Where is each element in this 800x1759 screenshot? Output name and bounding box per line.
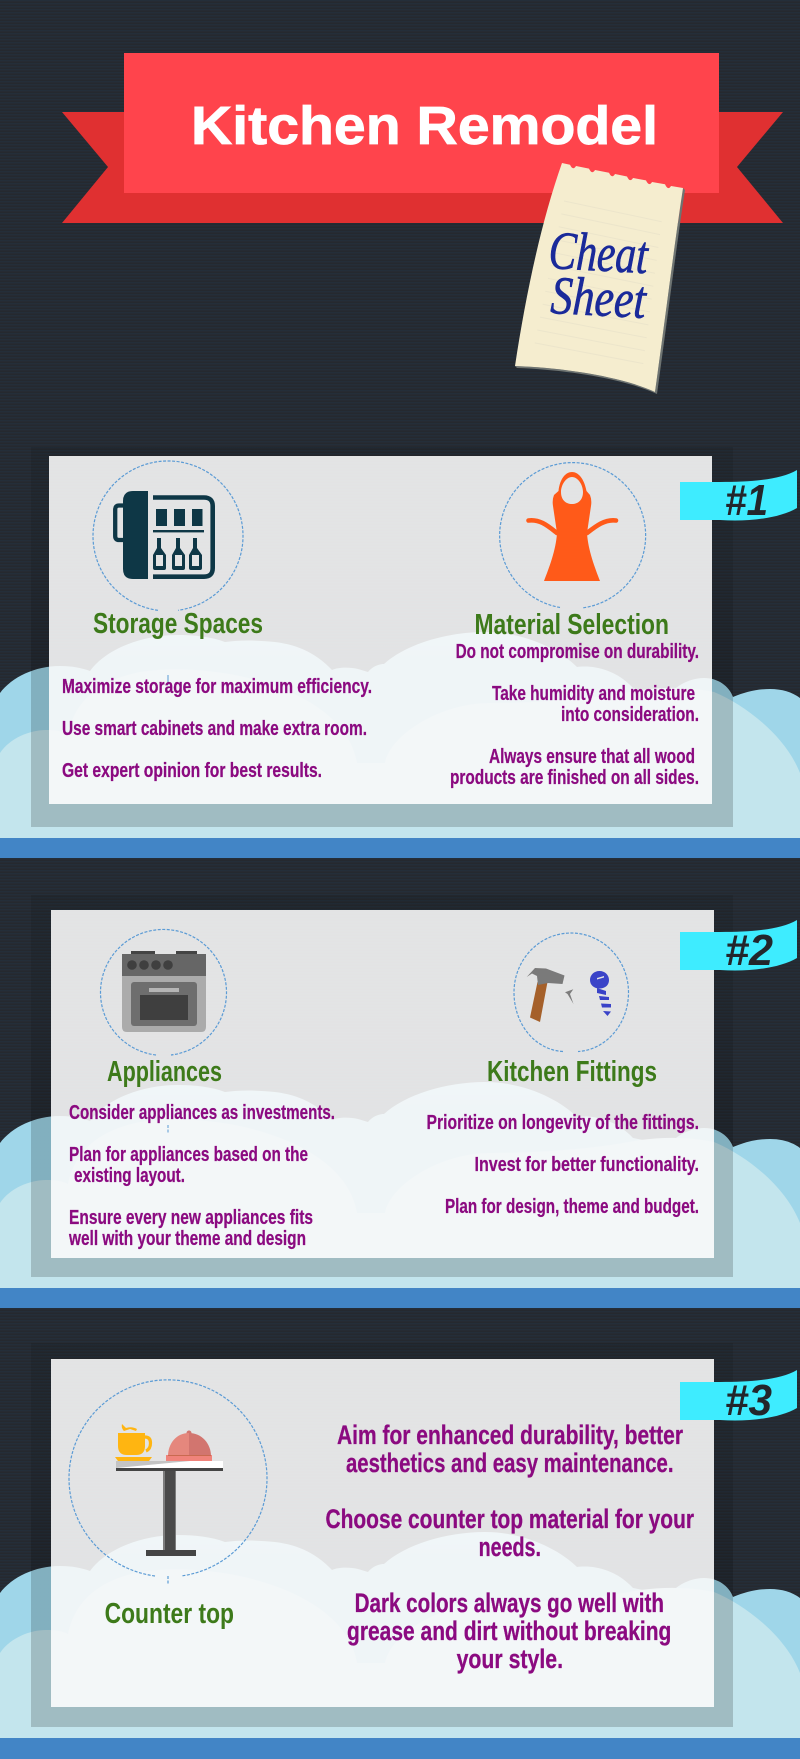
- clouds back: [0, 1082, 800, 1288]
- note text: Sheet: [549, 265, 649, 330]
- material tips: into consideration.: [561, 704, 699, 726]
- appliances tips: well with your theme and design: [68, 1228, 306, 1250]
- clouds back: [0, 1532, 800, 1738]
- badge #3: #3: [725, 1376, 772, 1425]
- icon: apron in circle: [500, 463, 646, 608]
- title banner: [62, 53, 783, 223]
- clouds front: [0, 669, 800, 838]
- storage tips: [62, 675, 372, 782]
- material tips: Do not compromise on durability.: [456, 641, 699, 663]
- shadow panel: [31, 895, 733, 1277]
- shadow panel: [31, 1343, 733, 1727]
- material tips: products are finished on all sides.: [450, 767, 699, 789]
- appliances tips: existing layout.: [74, 1165, 185, 1187]
- counter top tips: aesthetics and easy maintenance.: [346, 1448, 674, 1478]
- card: [49, 456, 712, 804]
- material tips: [450, 641, 699, 789]
- icon: table with cup and cloche in circle: [69, 1380, 267, 1584]
- storage tips: Use smart cabinets and make extra room.: [62, 718, 367, 740]
- note text: [547, 220, 651, 330]
- badge #2: #2: [725, 926, 774, 975]
- blue bar: [0, 1288, 800, 1308]
- clouds front: [0, 1569, 800, 1738]
- heading: appliances: Appliances: [107, 1056, 222, 1088]
- blue bar: [0, 838, 800, 858]
- counter top tips: your style.: [457, 1644, 563, 1674]
- fittings tips: [426, 1112, 699, 1218]
- heading: storage spaces: Storage Spaces: [93, 608, 263, 640]
- badge #1: #1: [725, 476, 768, 525]
- counter top tips: needs.: [479, 1532, 541, 1562]
- torn note: cheat sheet: [515, 163, 685, 394]
- card: [51, 910, 714, 1258]
- icon: hammer, nail and screw in circle: [514, 933, 628, 1052]
- fittings tips: Invest for better functionality.: [474, 1154, 699, 1176]
- counter top tips: [326, 1420, 694, 1674]
- note text: Cheat: [547, 220, 651, 285]
- blue bar: [0, 1738, 800, 1759]
- fittings tips: Prioritize on longevity of the fittings.: [426, 1112, 699, 1134]
- heading: kitchen fittings: Kitchen Fittings: [487, 1056, 657, 1088]
- section 3: [0, 1343, 800, 1759]
- badge #3: [680, 1370, 797, 1425]
- heading: material selection: Material Selection: [474, 609, 669, 641]
- appliances tips: Plan for appliances based on the: [69, 1144, 308, 1166]
- counter top tips: Dark colors always go well with: [355, 1588, 664, 1618]
- counter top tips: Choose counter top material for your: [326, 1504, 694, 1534]
- counter top tips: Aim for enhanced durability, better: [337, 1420, 683, 1450]
- section 1: [0, 447, 800, 858]
- icon: oven in circle: [100, 929, 226, 1055]
- shadow panel: [31, 447, 733, 827]
- storage tips: Get expert opinion for best results.: [62, 760, 322, 782]
- clouds back: [0, 632, 800, 838]
- appliances tips: Consider appliances as investments.: [69, 1102, 335, 1124]
- badge #1: [680, 470, 797, 525]
- material tips: Take humidity and moisture: [492, 683, 695, 705]
- heading: counter top: Counter top: [105, 1598, 234, 1630]
- badge #2: [680, 920, 797, 975]
- fittings tips: Plan for design, theme and budget.: [445, 1196, 699, 1218]
- ribbon tails: [62, 112, 783, 223]
- title: Kitchen Remodel: [191, 96, 658, 156]
- icon: fridge in circle: [93, 461, 243, 610]
- clouds front: [0, 1119, 800, 1288]
- storage tips: Maximize storage for maximum efficiency.: [62, 676, 372, 698]
- appliances tips: [68, 1102, 335, 1250]
- ribbon front panel: [124, 53, 719, 193]
- card: [51, 1359, 714, 1707]
- material tips: Always ensure that all wood: [489, 746, 695, 768]
- appliances tips: Ensure every new appliances fits: [69, 1207, 313, 1229]
- counter top tips: grease and dirt without breaking: [347, 1616, 671, 1646]
- section 2: [0, 895, 800, 1308]
